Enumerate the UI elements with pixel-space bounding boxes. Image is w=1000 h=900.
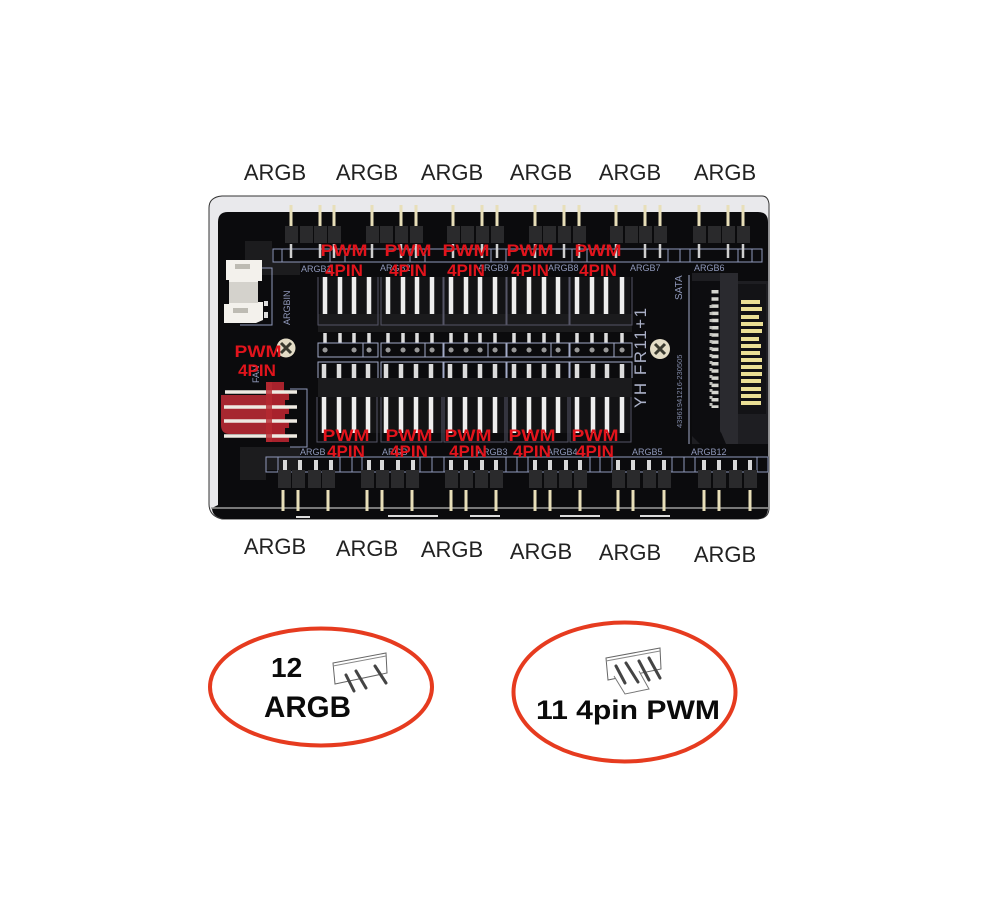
red 4-pin fan connector: [221, 382, 307, 447]
top tiny port labels: ARGB9: [478, 263, 509, 273]
acrylic plate: [209, 196, 769, 519]
top ARGB labels: ARGB: [244, 160, 306, 185]
bottom tiny port labels: ARGB: [300, 447, 326, 457]
red PWM 4PIN labels: PWM: [320, 241, 368, 260]
top ARGB labels: [244, 160, 756, 185]
dark raised blocks: [240, 241, 300, 480]
red PWM 4PIN labels: 4PIN: [389, 261, 427, 280]
bottom tiny port labels: FAN: [251, 365, 261, 383]
red PWM 4PIN labels: 4PIN: [511, 261, 549, 280]
top ARGB labels: ARGB: [336, 160, 398, 185]
red PWM 4PIN labels: PWM: [322, 426, 370, 445]
bottom ARGB labels: [244, 534, 756, 567]
red PWM 4PIN labels: PWM: [508, 426, 556, 445]
bottom tiny port labels: ARGB5: [632, 447, 663, 457]
red PWM 4PIN labels: PWM: [442, 241, 490, 260]
callout: 11 4pin PWM: [514, 622, 736, 762]
bottom ARGB labels: ARGB: [336, 536, 398, 561]
callout: 11 4pin PWM: 11 4pin PWM: [536, 695, 720, 725]
lower PWM pin rows: [317, 362, 632, 442]
top tiny port labels: SATA: [674, 275, 685, 300]
bottom tiny port labels: ARGB4: [547, 447, 578, 457]
top ARGB labels: ARGB: [694, 160, 756, 185]
red PWM 4PIN labels: 4PIN: [238, 361, 276, 380]
top ARGB labels: ARGB: [510, 160, 572, 185]
black circuit board: [212, 212, 768, 519]
icon: 4-pin header: [606, 648, 661, 694]
red PWM 4PIN labels: PWM: [572, 426, 618, 445]
top tiny port labels: ARGB2: [380, 263, 411, 273]
bottom ARGB labels: ARGB: [244, 534, 306, 559]
top tiny port labels: [282, 263, 725, 325]
red PWM 4PIN labels: 4PIN: [390, 442, 428, 461]
bottom tiny port labels: ARGB12: [691, 447, 727, 457]
top tiny port labels: ARGB8: [548, 263, 579, 273]
acrylic bottom edge reflection: [211, 507, 768, 509]
callout: 12 ARGB: ARGB: [264, 691, 351, 724]
callout: 12 ARGB: [210, 628, 432, 746]
red PWM 4PIN labels: [234, 241, 622, 461]
bottom ARGB labels: ARGB: [694, 542, 756, 567]
bottom ARGB labels: ARGB: [599, 540, 661, 565]
red PWM 4PIN labels: 4PIN: [579, 261, 617, 280]
top tiny port labels: ARGBIN: [282, 290, 292, 325]
top ARGB headers: [273, 205, 762, 262]
white ARGB input connector: [224, 260, 272, 325]
red PWM 4PIN labels: 4PIN: [325, 261, 363, 280]
board silkscreen text: YH FR11+1: [631, 306, 650, 408]
left mounting screw: [276, 338, 296, 358]
bottom tiny port labels: ARGB: [382, 447, 408, 457]
red PWM 4PIN labels: 4PIN: [327, 442, 365, 461]
red PWM 4PIN labels: PWM: [574, 241, 622, 260]
board silkscreen text: 43961941216-230505: [675, 355, 684, 428]
top tiny port labels: ARGB6: [694, 263, 725, 273]
top ARGB labels: ARGB: [599, 160, 661, 185]
top ARGB labels: ARGB: [421, 160, 483, 185]
icon: 3-pin header: [333, 653, 387, 691]
bottom ARGB headers: [266, 457, 768, 511]
board silkscreen text: [631, 306, 684, 428]
red PWM 4PIN labels: 4PIN: [449, 442, 487, 461]
bottom ARGB labels: ARGB: [510, 539, 572, 564]
red PWM 4PIN labels: 4PIN: [576, 442, 614, 461]
red PWM 4PIN labels: PWM: [506, 241, 554, 260]
red PWM 4PIN labels: PWM: [444, 426, 492, 445]
right mounting screw: [650, 339, 670, 359]
bottom ARGB labels: ARGB: [421, 537, 483, 562]
top tiny port labels: ARGB1: [301, 264, 332, 274]
red PWM 4PIN labels: PWM: [234, 342, 282, 361]
bottom tiny port labels: [251, 365, 727, 457]
red PWM 4PIN labels: PWM: [386, 426, 432, 445]
product photo: hub board: [209, 196, 769, 519]
SATA power connector: [689, 273, 768, 444]
red PWM 4PIN labels: 4PIN: [447, 261, 485, 280]
upper PWM pin rows: [318, 277, 632, 357]
red PWM 4PIN labels: 4PIN: [513, 442, 551, 461]
callout: 12 ARGB: 12: [271, 652, 302, 683]
bottom tiny port labels: ARGB3: [477, 447, 508, 457]
red PWM 4PIN labels: PWM: [384, 241, 432, 260]
top tiny port labels: ARGB7: [630, 263, 661, 273]
